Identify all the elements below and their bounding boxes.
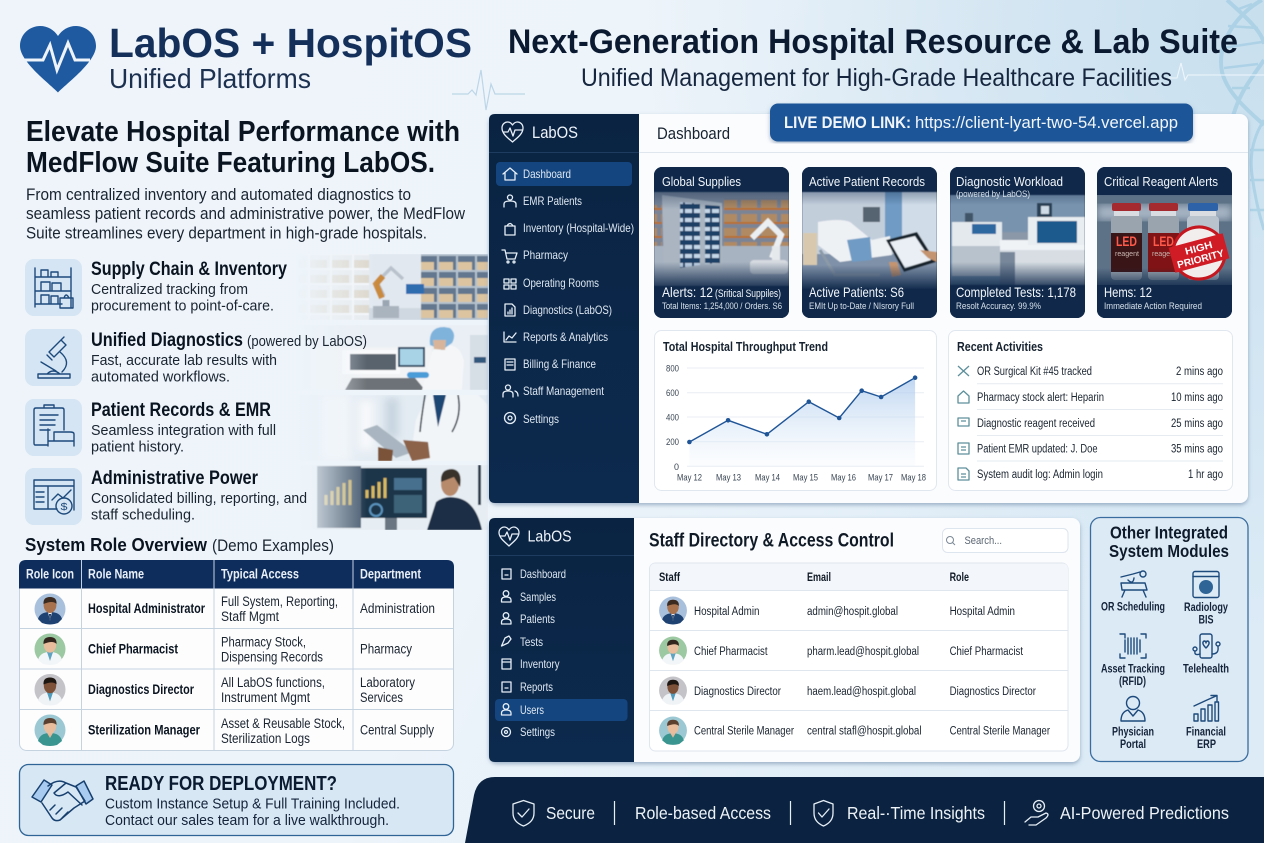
row: hospital admin <box>659 597 1015 624</box>
card text: EMIt Up to-Date / NIsrory Full <box>809 301 914 312</box>
feature text: automated workflows. <box>91 368 230 386</box>
stamp: high priority: PRIORITY <box>1176 248 1226 271</box>
brand name: LabOS + HospitOS <box>109 20 472 66</box>
panel: recent activities <box>948 330 1232 490</box>
headline: MedFlow Suite Featuring LabOS. <box>26 147 435 179</box>
intro paragraph: Suite streamlines every department in high-grade hospitals. <box>26 224 427 242</box>
feature text <box>91 352 277 386</box>
card: diagnostic workload <box>950 167 1085 318</box>
module: telehealth: Telehealth <box>1183 664 1229 676</box>
feature: patient records <box>25 399 276 456</box>
row: chief pharmacist <box>659 637 1024 665</box>
card text <box>956 174 1076 312</box>
activity: reagent received: Diagnostic reagent received <box>977 418 1095 430</box>
headline: Elevate Hospital Performance with <box>26 116 460 148</box>
sidebar <box>489 518 634 762</box>
icon: gear in hand <box>1025 800 1048 825</box>
feature text: Fast, accurate lab results with <box>91 352 277 369</box>
nav list <box>502 567 566 739</box>
icon tile: dashboard and coin <box>25 468 82 525</box>
card text: Immediate Action Required <box>1104 301 1202 312</box>
label: real-time insights: Real-·Time Insights <box>847 803 985 823</box>
feature title: Patient Records & EMR <box>91 399 271 421</box>
row: hospital admin: admin@hospit.global <box>807 606 898 618</box>
nav: settings <box>504 412 559 426</box>
main subtitle: Unified Management for High-Grade Healthcare Facilities <box>581 64 1172 92</box>
table header: Email <box>807 572 831 584</box>
table header <box>19 560 454 588</box>
x axis labels: May 13 <box>716 472 741 484</box>
feature title: Unified Diagnostics <box>91 329 243 351</box>
label: role-based access: Role-based Access <box>635 803 771 823</box>
row: sterilization manager: Sterilization Manager <box>88 722 201 738</box>
activity: pharmacy alert: 10 mins ago <box>1171 392 1223 404</box>
card: global supplies <box>654 167 789 318</box>
nav: staff: Staff Management <box>523 384 605 398</box>
feature text <box>91 490 307 524</box>
nav list: Settings <box>520 725 555 739</box>
row: hospital administrator: Hospital Administrator <box>88 601 206 616</box>
card text: Active Patients: S6 <box>809 284 904 300</box>
callout text: Custom Instance Setup & Full Training Included. <box>105 796 400 812</box>
card text: Resolt Accuracy. 99.9% <box>956 301 1041 312</box>
table: system roles <box>19 560 454 750</box>
photo: warehouse robot <box>297 254 488 320</box>
nav: dashboard: Dashboard <box>523 167 571 181</box>
module: physician portal: Physician <box>1112 727 1154 739</box>
panel title: Recent Activities <box>957 340 1043 354</box>
row: diagnostics director: Diagnostics Director <box>88 682 195 697</box>
sidebar logo <box>502 122 578 142</box>
icon tile: dashboard and coin: $ <box>60 502 68 513</box>
row: diagnostics director: Services <box>360 690 403 705</box>
nav: staff <box>503 384 605 398</box>
decorative white pulse line <box>1168 63 1264 80</box>
section heading: system role overview: (Demo Examples) <box>212 536 334 555</box>
icon: shield network <box>814 800 833 826</box>
nav list: Samples <box>520 590 556 604</box>
label: secure: Secure <box>546 803 595 823</box>
table header: Role <box>950 572 969 584</box>
sidebar logo: LabOS <box>532 124 578 142</box>
row: central sterile manager: Central Sterile Manager <box>950 726 1050 738</box>
card: active patient records <box>802 167 937 318</box>
nav list: Reports <box>520 680 553 694</box>
row: diagnostics director <box>34 674 415 706</box>
module: financial erp: Financial <box>1186 727 1226 739</box>
card: critical reagent alerts <box>1097 167 1233 318</box>
row: diagnostics director: Instrument Mgmt <box>221 690 310 705</box>
activity: reagent received: 25 mins ago <box>1171 418 1223 430</box>
stamp: high priority <box>1168 225 1230 281</box>
row: central sterile manager: Central Sterile Manager <box>694 726 794 738</box>
nav: diagnostics: Diagnostics (LabOS) <box>523 303 612 317</box>
activity: emr updated <box>958 443 1223 456</box>
feature title: Administrative Power <box>91 467 258 489</box>
nav list: Dashboard <box>520 567 566 581</box>
row: chief pharmacist: pharm.lead@hospit.global <box>807 646 919 658</box>
panel title: Other Integrated <box>1110 522 1228 542</box>
nav: pharmacy <box>502 248 568 263</box>
feature: administrative power <box>25 467 307 525</box>
row: sterilization manager: Asset & Reusable Stock, <box>221 716 345 731</box>
active nav item <box>495 699 628 721</box>
card text: (Sritical Suppiles) <box>715 288 781 300</box>
nav list: Tests <box>520 635 543 649</box>
nav: emr patients <box>504 194 582 208</box>
row: central sterile manager: central stafl@hospit.global <box>807 726 922 738</box>
row: chief pharmacist: Chief Pharmacist <box>88 642 178 656</box>
activity: surgical kit <box>958 366 1223 378</box>
module: physician portal <box>1112 696 1154 751</box>
intro paragraph: seamless patient records and administrative power, the MedFlow <box>26 205 465 223</box>
row: chief pharmacist: Dispensing Records <box>221 650 323 664</box>
row: chief pharmacist: Pharmacy Stock, <box>221 634 306 650</box>
feature text: staff scheduling. <box>91 506 195 524</box>
panel: staff directory window <box>489 518 1080 762</box>
icon tile: record and bed <box>25 399 82 456</box>
module: radiology bis: BIS <box>1198 614 1214 626</box>
module: radiology bis: Radiology <box>1184 602 1228 614</box>
y axis labels: 200 <box>666 437 679 448</box>
module: radiology bis <box>1184 572 1228 626</box>
area and line <box>687 375 917 466</box>
card text: Completed Tests: 1,178 <box>956 284 1076 300</box>
nav list: Users <box>520 703 544 717</box>
live demo link: https://client-lyart-two-54.vercel.app <box>915 113 1178 132</box>
nav: billing <box>505 357 596 371</box>
row: sterilization manager: Sterilization Logs <box>221 731 310 746</box>
activity: emr updated: Patient EMR updated: J. Doe <box>977 444 1098 456</box>
decorative DNA helix <box>1221 0 1264 230</box>
card: critical reagent alerts: reagent <box>1152 251 1176 258</box>
icon: heart pulse <box>20 26 96 92</box>
x axis labels: May 14 <box>755 472 780 484</box>
sidebar logo: LabOS <box>528 528 572 546</box>
live demo link: LIVE DEMO LINK: <box>784 113 911 132</box>
callout text: Contact our sales team for a live walkthrough. <box>105 812 389 829</box>
row: diagnostics director: Diagnostics Director <box>694 686 781 698</box>
table header: Department <box>360 566 421 582</box>
card text: Global Supplies <box>662 174 741 189</box>
icon: shield <box>513 800 534 826</box>
staff heading: Staff Directory & Access Control <box>649 530 894 552</box>
panel: other integrated system modules <box>1090 518 1248 762</box>
table header <box>650 564 1068 590</box>
live demo link <box>770 104 1193 142</box>
feature text: Seamless integration with full <box>91 422 276 439</box>
row: hospital administrator: Staff Mgmt <box>221 609 279 624</box>
row: sterilization manager <box>34 714 434 746</box>
activity: pharmacy alert: Pharmacy stock alert: Heparin <box>977 392 1104 404</box>
y axis labels <box>666 364 679 473</box>
module: asset tracking: (RFID) <box>1119 676 1146 688</box>
x axis labels: May 18 <box>901 472 926 484</box>
module: asset tracking: Asset Tracking <box>1101 664 1165 676</box>
search box: Search... <box>964 535 1002 547</box>
photo: lab analyser <box>344 326 488 390</box>
row: diagnostics director: haem.lead@hospit.global <box>807 686 916 698</box>
section heading: system role overview: System Role Overview <box>25 535 208 555</box>
row: central sterile manager <box>659 717 1050 745</box>
nav: pharmacy: Pharmacy <box>523 248 568 262</box>
feature text <box>91 422 276 456</box>
feature text: procurement to point-of-care. <box>91 298 274 314</box>
nav: emr patients: EMR Patients <box>523 194 582 208</box>
label: ai-powered predictions: AI-Powered Predictions <box>1060 803 1229 823</box>
brand subtitle: Unified Platforms <box>109 63 311 94</box>
nav: dashboard <box>503 167 571 181</box>
x axis labels: May 17 <box>868 472 893 484</box>
card text <box>662 174 782 312</box>
x axis labels: May 12 <box>677 472 702 484</box>
card: critical reagent alerts: reagent <box>1115 251 1139 258</box>
icon: handshake <box>32 780 93 821</box>
main title: Next-Generation Hospital Resource & Lab Suite <box>508 23 1238 61</box>
card text: Active Patient Records <box>809 174 925 189</box>
logo <box>20 20 472 94</box>
card: critical reagent alerts: LED <box>1116 233 1137 249</box>
nav: reports: Reports & Analytics <box>523 330 608 344</box>
module: financial erp <box>1186 696 1226 751</box>
headline <box>26 116 460 179</box>
card text: Hems: 12 <box>1104 284 1152 300</box>
activity: emr updated: 35 mins ago <box>1171 444 1223 456</box>
card text: Total Items: 1,254,000 / Orders. S6 <box>662 301 782 312</box>
y axis labels: 400 <box>666 412 679 424</box>
nav: operating rooms: Operating Rooms <box>523 276 599 290</box>
y axis labels: 800 <box>666 364 679 374</box>
module: telehealth <box>1183 634 1229 676</box>
intro paragraph <box>26 186 465 242</box>
photo: doctor with tablet <box>358 395 487 461</box>
row: chief pharmacist <box>34 634 412 665</box>
row: diagnostics director: Laboratory <box>360 675 415 690</box>
card text: Alerts: 12 <box>662 284 713 300</box>
feature text: patient history. <box>91 438 184 456</box>
row: chief pharmacist: Chief Pharmacist <box>694 646 768 658</box>
feature title: Supply Chain & Inventory <box>91 258 287 280</box>
activity: surgical kit: OR Surgical Kit #45 tracked <box>977 366 1092 378</box>
nav: inventory: Inventory (Hospital-Wide) <box>523 221 634 235</box>
module: physician portal: Portal <box>1120 739 1146 751</box>
icon tile: shelves <box>25 259 82 316</box>
callout text <box>105 796 400 829</box>
card: critical reagent alerts: LED <box>1153 233 1174 249</box>
row: chief pharmacist: Pharmacy <box>360 642 412 656</box>
nav: reports <box>504 330 608 344</box>
table header: Staff <box>659 572 680 584</box>
panel title: System Modules <box>1109 541 1229 561</box>
dashboard heading: Dashboard <box>657 124 730 143</box>
callout: ready for deployment <box>20 764 454 836</box>
row: hospital administrator: Full System, Reporting, <box>221 594 338 609</box>
feature: unified diagnostics <box>25 329 367 386</box>
feature: supply chain <box>25 258 287 316</box>
row: hospital admin: Hospital Admin <box>950 606 1015 618</box>
staff table <box>650 563 1068 751</box>
x axis labels: May 16 <box>831 472 856 484</box>
panel: dashboard window <box>489 114 1248 503</box>
card text <box>1104 174 1218 312</box>
row: hospital administrator <box>34 594 435 624</box>
table header: Typical Access <box>221 566 299 582</box>
module: or scheduling <box>1101 571 1165 614</box>
section heading: system role overview <box>25 535 334 555</box>
y axis labels: 600 <box>666 388 679 399</box>
activity: surgical kit: 2 mins ago <box>1176 366 1223 378</box>
card text <box>809 174 925 312</box>
x axis labels <box>677 472 926 484</box>
chart title: Total Hospital Throughput Trend <box>663 340 828 354</box>
chart: total hospital throughput trend <box>654 330 936 490</box>
nav: diagnostics <box>505 303 612 317</box>
activity: audit log: 1 hr ago <box>1188 469 1223 481</box>
card text: Diagnostic Workload <box>956 174 1063 189</box>
nav list: Inventory <box>520 657 560 671</box>
feature text: Consolidated billing, reporting, and <box>91 490 307 507</box>
active nav item <box>496 162 632 186</box>
row: chief pharmacist: Chief Pharmacist <box>950 646 1024 658</box>
sidebar <box>489 114 639 503</box>
module: asset tracking <box>1101 634 1165 688</box>
intro paragraph: From centralized inventory and automated diagnostics to <box>26 186 411 204</box>
decorative ECG line <box>452 70 525 110</box>
feature text <box>91 281 274 314</box>
nav: billing: Billing & Finance <box>523 357 596 371</box>
row: sterilization manager: Central Supply <box>360 722 434 738</box>
module: financial erp: ERP <box>1197 739 1216 751</box>
x axis labels: May 15 <box>793 472 818 484</box>
card text: Critical Reagent Alerts <box>1104 174 1218 189</box>
feature text: Centralized tracking from <box>91 281 248 298</box>
callout heading: READY FOR DEPLOYMENT? <box>105 773 337 795</box>
stamp: high priority: HIGH <box>1184 240 1214 258</box>
activity: audit log <box>958 468 1223 481</box>
activity: pharmacy alert <box>958 391 1223 404</box>
table header: Role Name <box>88 566 144 582</box>
module: or scheduling: OR Scheduling <box>1101 602 1165 614</box>
activity: audit log: System audit log: Admin login <box>977 469 1103 481</box>
feature title <box>91 329 367 351</box>
card text: (powered by LabOS) <box>956 189 1030 200</box>
feature title: (powered by LabOS) <box>247 333 367 350</box>
row: hospital admin: Hospital Admin <box>694 606 760 618</box>
sidebar logo <box>499 527 572 546</box>
row: diagnostics director <box>659 677 1036 705</box>
row: diagnostics director: All LabOS functions, <box>221 675 325 690</box>
row: hospital administrator: Administration <box>360 601 435 616</box>
footer bar <box>465 777 1264 843</box>
nav list: Patients <box>520 612 555 626</box>
panel title <box>1109 522 1229 561</box>
icon tile: microscope <box>25 329 82 386</box>
row: diagnostics director: Diagnostics Director <box>950 686 1036 698</box>
y axis labels: 0 <box>674 462 679 473</box>
activity: reagent received <box>958 418 1223 430</box>
nav: settings: Settings <box>523 412 559 426</box>
photo: analyst at monitors <box>316 465 483 530</box>
search box <box>942 528 1068 552</box>
nav: operating rooms <box>504 276 599 290</box>
table header: Role Icon <box>26 566 74 582</box>
